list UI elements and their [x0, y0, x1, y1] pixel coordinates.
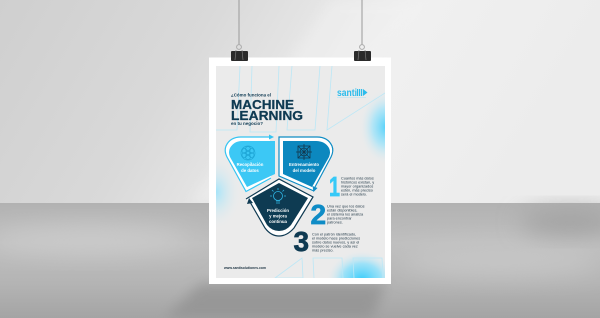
segment 2: entrenamiento del modelo: del modelo: [293, 168, 316, 173]
icon: neural network: [241, 146, 255, 160]
icon: light bulb: [270, 188, 286, 203]
step 2: están disponibles,: [327, 208, 357, 212]
binder clip left: [231, 45, 248, 61]
step 1: [329, 171, 374, 202]
step 1: será el modelo.: [341, 192, 367, 196]
website url: www.santisolutiones.com: [223, 265, 266, 270]
segment 3: predicción y mejora continua: y mejora: [269, 214, 287, 218]
cycle diagram: [225, 134, 333, 236]
title: MACHINE: [231, 97, 294, 112]
poster sheet: [209, 58, 391, 284]
step 3: 3: [294, 226, 309, 257]
background: floor: [0, 203, 600, 318]
background: light streak: [190, 0, 430, 203]
step 2: el sistema los analiza: [327, 212, 364, 216]
segment 1: recopilación de datos: [225, 134, 275, 192]
poster shadow on floor: [165, 284, 386, 318]
step 2: Una vez que los datos: [327, 204, 365, 208]
poster inner panel: [216, 66, 385, 278]
binder clip right: [354, 45, 371, 61]
title: en tu negocio?: [231, 121, 263, 126]
step 1: estén, más preciso: [341, 188, 373, 192]
segment 1: recopilación de datos: Recopilación: [237, 162, 264, 167]
segment 2: entrenamiento del modelo: Entrenamiento: [289, 162, 319, 167]
title: [231, 92, 303, 126]
segment 1: recopilación de datos: de datos: [241, 168, 259, 173]
segment 2: entrenamiento del modelo: [279, 137, 333, 192]
step 1: Cuantos más datos: [341, 176, 374, 180]
step 3: el modelo hace predicciones: [312, 236, 360, 240]
step 3: [294, 226, 360, 257]
step 2: [310, 199, 365, 230]
background: concrete wall: [0, 0, 600, 203]
step 1: mayor organizados: [341, 184, 373, 188]
step 3: sobre datos nuevos, y así el: [312, 240, 359, 244]
step 2: para encontrar: [327, 216, 352, 220]
step 1: históricos existan, y: [341, 180, 374, 184]
step 3: más preciso.: [312, 248, 334, 252]
title: ¿Cómo funciona el: [231, 92, 271, 98]
step 2: 2: [310, 199, 326, 230]
hanging strings: [239, 0, 362, 45]
step 3: Con el patrón identificado,: [312, 232, 356, 236]
segment 3: predicción y mejora continua: Predicción: [267, 208, 289, 213]
segment 3: predicción y mejora continua: [246, 179, 313, 236]
decorative glows and circuit lines: [216, 66, 385, 278]
title: LEARNING: [231, 108, 303, 123]
icon: circuit network: [296, 144, 312, 160]
step 2: patrones.: [327, 220, 343, 224]
logo: santi: santi: [337, 88, 357, 99]
step 3: modelo se vuelve cada vez: [312, 244, 358, 248]
segment 3: predicción y mejora continua: continua: [269, 219, 288, 224]
step 1: 1: [329, 171, 340, 202]
